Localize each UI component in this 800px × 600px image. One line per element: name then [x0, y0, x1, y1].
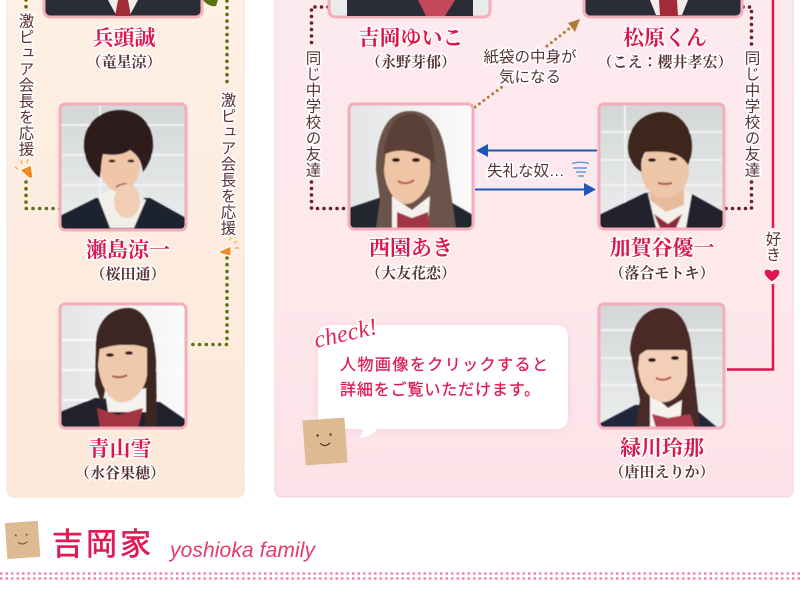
arrow: green arrowhead to Hyodo	[203, 0, 218, 6]
photo: Seshima Ryoichi	[60, 104, 186, 232]
connector: green dotted line to Seshima	[26, 0, 60, 208]
icon: smiling paper bag in heading	[5, 521, 40, 559]
label: same junior high right: 同じ中学校の友達	[742, 50, 760, 178]
heading: Yoshioka family: 吉岡家	[52, 527, 154, 562]
connector: maroon dotted line left	[312, 7, 348, 208]
photo: Yoshioka Yuiko	[329, 0, 490, 17]
name: Seshima Ryoichi	[86, 238, 170, 283]
panel: left family background	[7, 0, 244, 497]
icon: smiling paper bag in callout	[303, 418, 348, 465]
arrow: blue arrow to Nishizono	[476, 144, 597, 157]
callout: click hint	[317, 324, 569, 438]
connector: red love line	[727, 0, 773, 370]
mask: gap in red line behind label	[764, 228, 782, 284]
name: Kagaya Yuichi	[609, 236, 715, 282]
connector: maroon dotted line right	[725, 7, 752, 208]
label: cheer left: 激ピュア会長を応援	[16, 13, 34, 158]
text: check handwriting: check!	[312, 314, 380, 354]
name: Matsubara-kun: 松原くん	[623, 26, 707, 50]
photo: Kagaya Yuichi	[599, 104, 724, 232]
label: rude guy: 失礼な奴…	[487, 162, 565, 180]
name: Midorikawa Reina: 緑川玲那	[620, 436, 704, 460]
icon: tornado	[572, 162, 589, 176]
name: Aoyama Yuki: （水谷果穂）	[75, 464, 165, 482]
name: Matsubara-kun	[597, 26, 733, 71]
arrow: blue arrow to Kagaya	[475, 183, 596, 196]
label: curious about paper bag: 気になる	[499, 68, 561, 86]
name: Yoshioka Yuiko: （永野芽郁）	[366, 53, 456, 71]
name: Matsubara-kun: （こえ：櫻井孝宏）	[597, 53, 733, 71]
label: likes: 好き	[764, 231, 781, 262]
name: Aoyama Yuki	[75, 437, 165, 482]
name: Nishizono Aki: （大友花恋）	[366, 264, 456, 282]
label: curious about paper bag	[483, 48, 577, 86]
divider: double pink dots	[0, 574, 800, 578]
label: cheer right: 激ピュア会長を応援	[218, 92, 236, 237]
label: curious about paper bag: 紙袋の中身が	[483, 48, 577, 66]
name: Seshima Ryoichi: 瀬島涼一	[86, 238, 170, 262]
name: Yoshioka Yuiko	[358, 26, 464, 71]
callout text	[340, 356, 548, 399]
arrow: brown dotted arrow to Matsubara	[475, 19, 580, 107]
heading: yoshioka family romanised: yoshioka family	[168, 539, 316, 562]
photo: Nishizono Aki	[349, 104, 473, 232]
name: Hyodo Makoto	[86, 26, 162, 71]
callout text: 詳細をご覧いただけます。	[340, 381, 540, 399]
icon: heart	[764, 269, 780, 282]
name: Kagaya Yuichi: （落合モトキ）	[609, 264, 715, 282]
name: Yoshioka Yuiko: 吉岡ゆいこ	[358, 26, 464, 50]
name: Aoyama Yuki: 青山雪	[88, 437, 152, 461]
name: Nishizono Aki: 西園あき	[369, 236, 453, 260]
name: Hyodo Makoto: （竜星涼）	[86, 53, 162, 71]
icon: megaphone right	[218, 237, 239, 256]
name: Kagaya Yuichi: 加賀谷優一	[610, 236, 714, 260]
callout text: 人物画像をクリックすると	[340, 356, 548, 374]
name: Midorikawa Reina	[609, 436, 715, 481]
icon: megaphone left	[15, 159, 33, 178]
name: Nishizono Aki	[366, 236, 456, 282]
name: Seshima Ryoichi: （桜田通）	[90, 265, 166, 283]
photo: Aoyama Yuki	[60, 304, 186, 430]
name: Midorikawa Reina: （唐田えりか）	[609, 463, 715, 481]
connector: green dotted line from Aoyama to Hyodo	[187, 1, 227, 344]
photo: Midorikawa Reina	[599, 304, 724, 430]
name: Hyodo Makoto: 兵頭誠	[92, 26, 156, 50]
photo: Hyodo Makoto	[44, 0, 202, 17]
label: same junior high left: 同じ中学校の友達	[304, 50, 321, 178]
photo: Matsubara-kun	[584, 0, 742, 17]
panel: right family background	[275, 0, 793, 497]
